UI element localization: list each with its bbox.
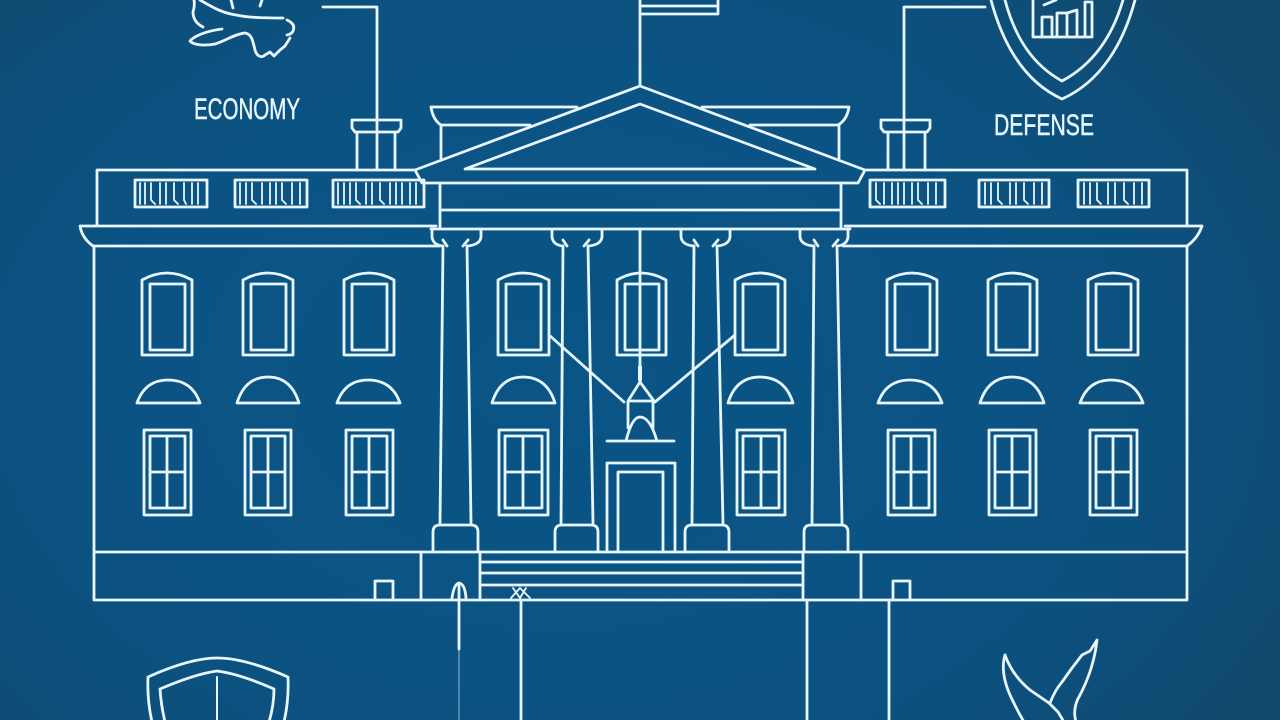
- label: economy: ECONOMY: [194, 93, 300, 126]
- icon: dove, bottom right: [1003, 640, 1097, 720]
- column 2: [552, 230, 602, 551]
- icon: dove, top left: [190, 0, 294, 57]
- left wing roof and balustrade: [80, 170, 440, 246]
- chimney: left: [352, 120, 401, 170]
- door: [607, 463, 675, 551]
- balustrade panels: right: [870, 180, 1149, 207]
- leader line: economy: [323, 7, 377, 170]
- front steps: [480, 562, 803, 585]
- building: pediment: [415, 86, 865, 183]
- building: walls and base: [94, 246, 1187, 600]
- right wing roof and balustrade: [843, 170, 1202, 246]
- icon: shield, bottom left: [148, 658, 288, 720]
- leader line: defense: [904, 7, 985, 170]
- balustrade panels: left: [135, 180, 424, 207]
- central leader lines and small tower: [549, 229, 735, 441]
- lower windows: [144, 430, 1137, 515]
- lower leader lines: [452, 583, 889, 720]
- bar chart inside shield: [1033, 0, 1092, 37]
- flag and flagpole: [640, 0, 718, 86]
- half-moon windows: [137, 377, 1143, 403]
- icon: shield with bar chart, top right: [991, 0, 1135, 99]
- small base openings: [375, 581, 910, 600]
- column 1: [432, 230, 481, 551]
- chimney: right: [881, 120, 930, 170]
- label: defense: DEFENSE: [994, 109, 1094, 142]
- column 4: [800, 230, 848, 551]
- column 3: [681, 230, 730, 551]
- building: frieze: [431, 183, 850, 229]
- building: roof behind pediment: [431, 107, 849, 158]
- upper windows: [142, 273, 1138, 355]
